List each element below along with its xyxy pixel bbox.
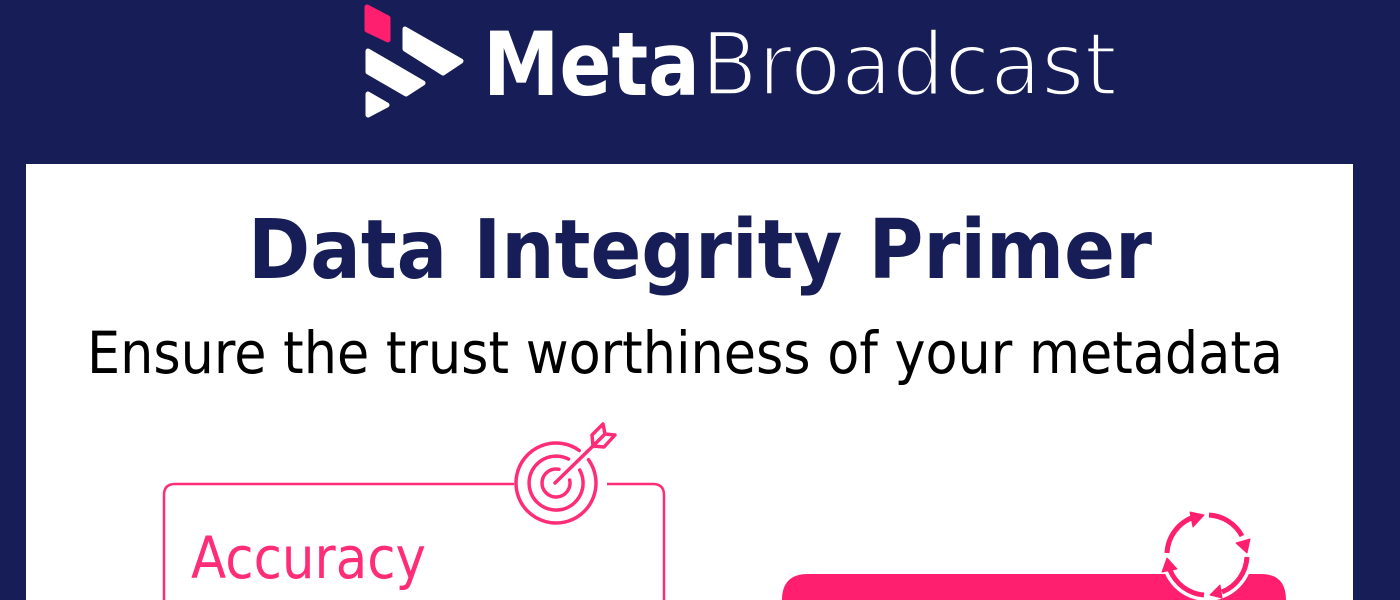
panel: accuracy card [164, 424, 664, 600]
card heading: Accuracy: Accuracy [191, 524, 426, 592]
panel: second pink card [782, 509, 1286, 600]
card outline [164, 484, 664, 600]
subtitle: Ensure the trust worthiness of your metadata [87, 319, 1283, 387]
icon backing disc [1161, 509, 1253, 600]
logo wordmark: Broadcast: Broadcast [701, 13, 1117, 116]
title: Data Integrity Primer [248, 203, 1153, 298]
logo: MetaBroadcast [367, 7, 1117, 116]
panel: white content area [26, 164, 1353, 600]
icon: target with arrow [516, 424, 615, 523]
icon: cycle arrows [1161, 509, 1253, 600]
icon: logo mark [367, 7, 461, 115]
filled card [782, 574, 1286, 600]
logo wordmark: Meta: Meta [483, 13, 700, 116]
